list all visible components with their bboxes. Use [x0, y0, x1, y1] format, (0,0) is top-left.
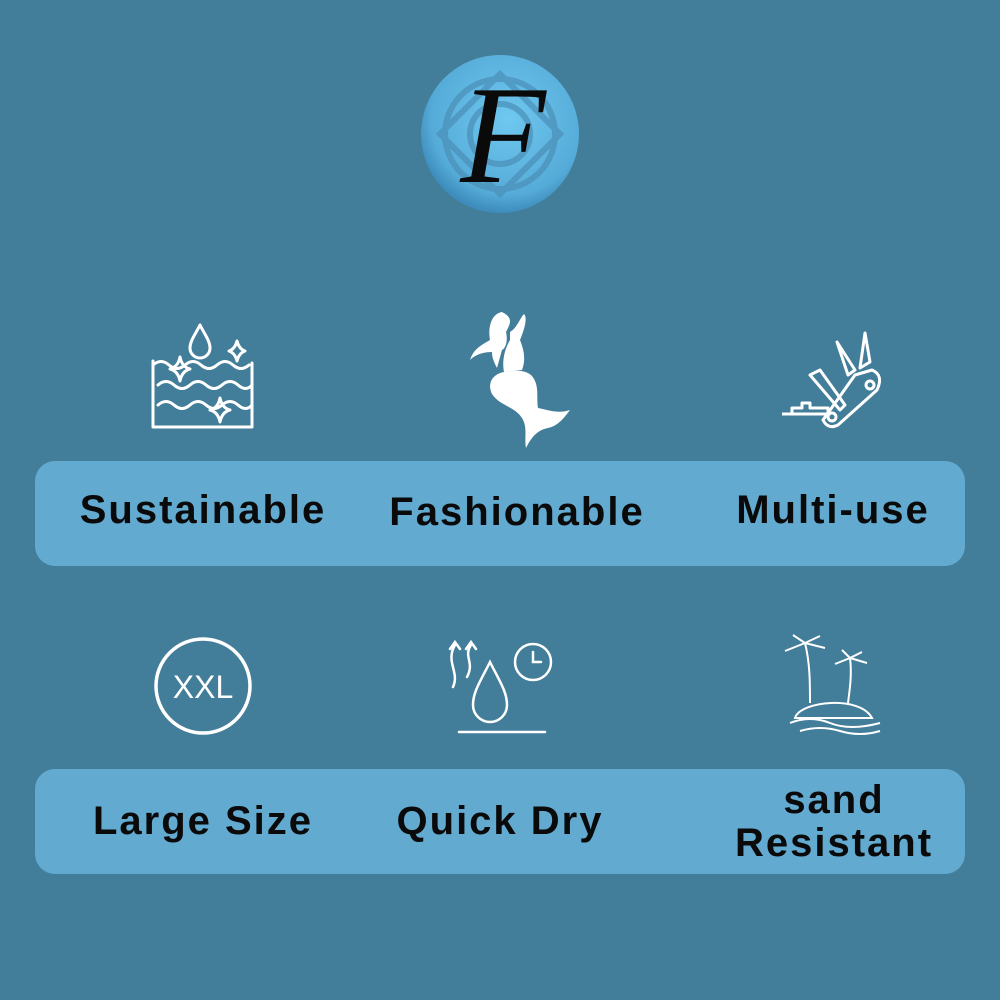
logo: F [459, 58, 547, 213]
label: sand Resistant [735, 778, 933, 865]
logo [421, 55, 579, 213]
icon: XXL: XXL [173, 669, 233, 705]
icon: mermaid [470, 312, 570, 448]
label: sand Resistant: Resistant [735, 821, 933, 865]
panel: row 2 [35, 769, 965, 874]
icon: quick dry [448, 640, 552, 734]
label: Large Size: Large Size [93, 799, 313, 843]
icon: water sustainable [151, 323, 254, 428]
icon: island [784, 634, 880, 735]
label: Quick Dry: Quick Dry [397, 799, 603, 843]
label: Fashionable: Fashionable [389, 490, 645, 534]
panel: row 1 [35, 461, 965, 566]
icon: multi-tool [782, 332, 882, 428]
icon: XXL [154, 637, 252, 735]
label: Sustainable: Sustainable [80, 488, 326, 532]
label: Multi-use: Multi-use [736, 488, 930, 532]
label: sand Resistant: sand [783, 778, 885, 822]
